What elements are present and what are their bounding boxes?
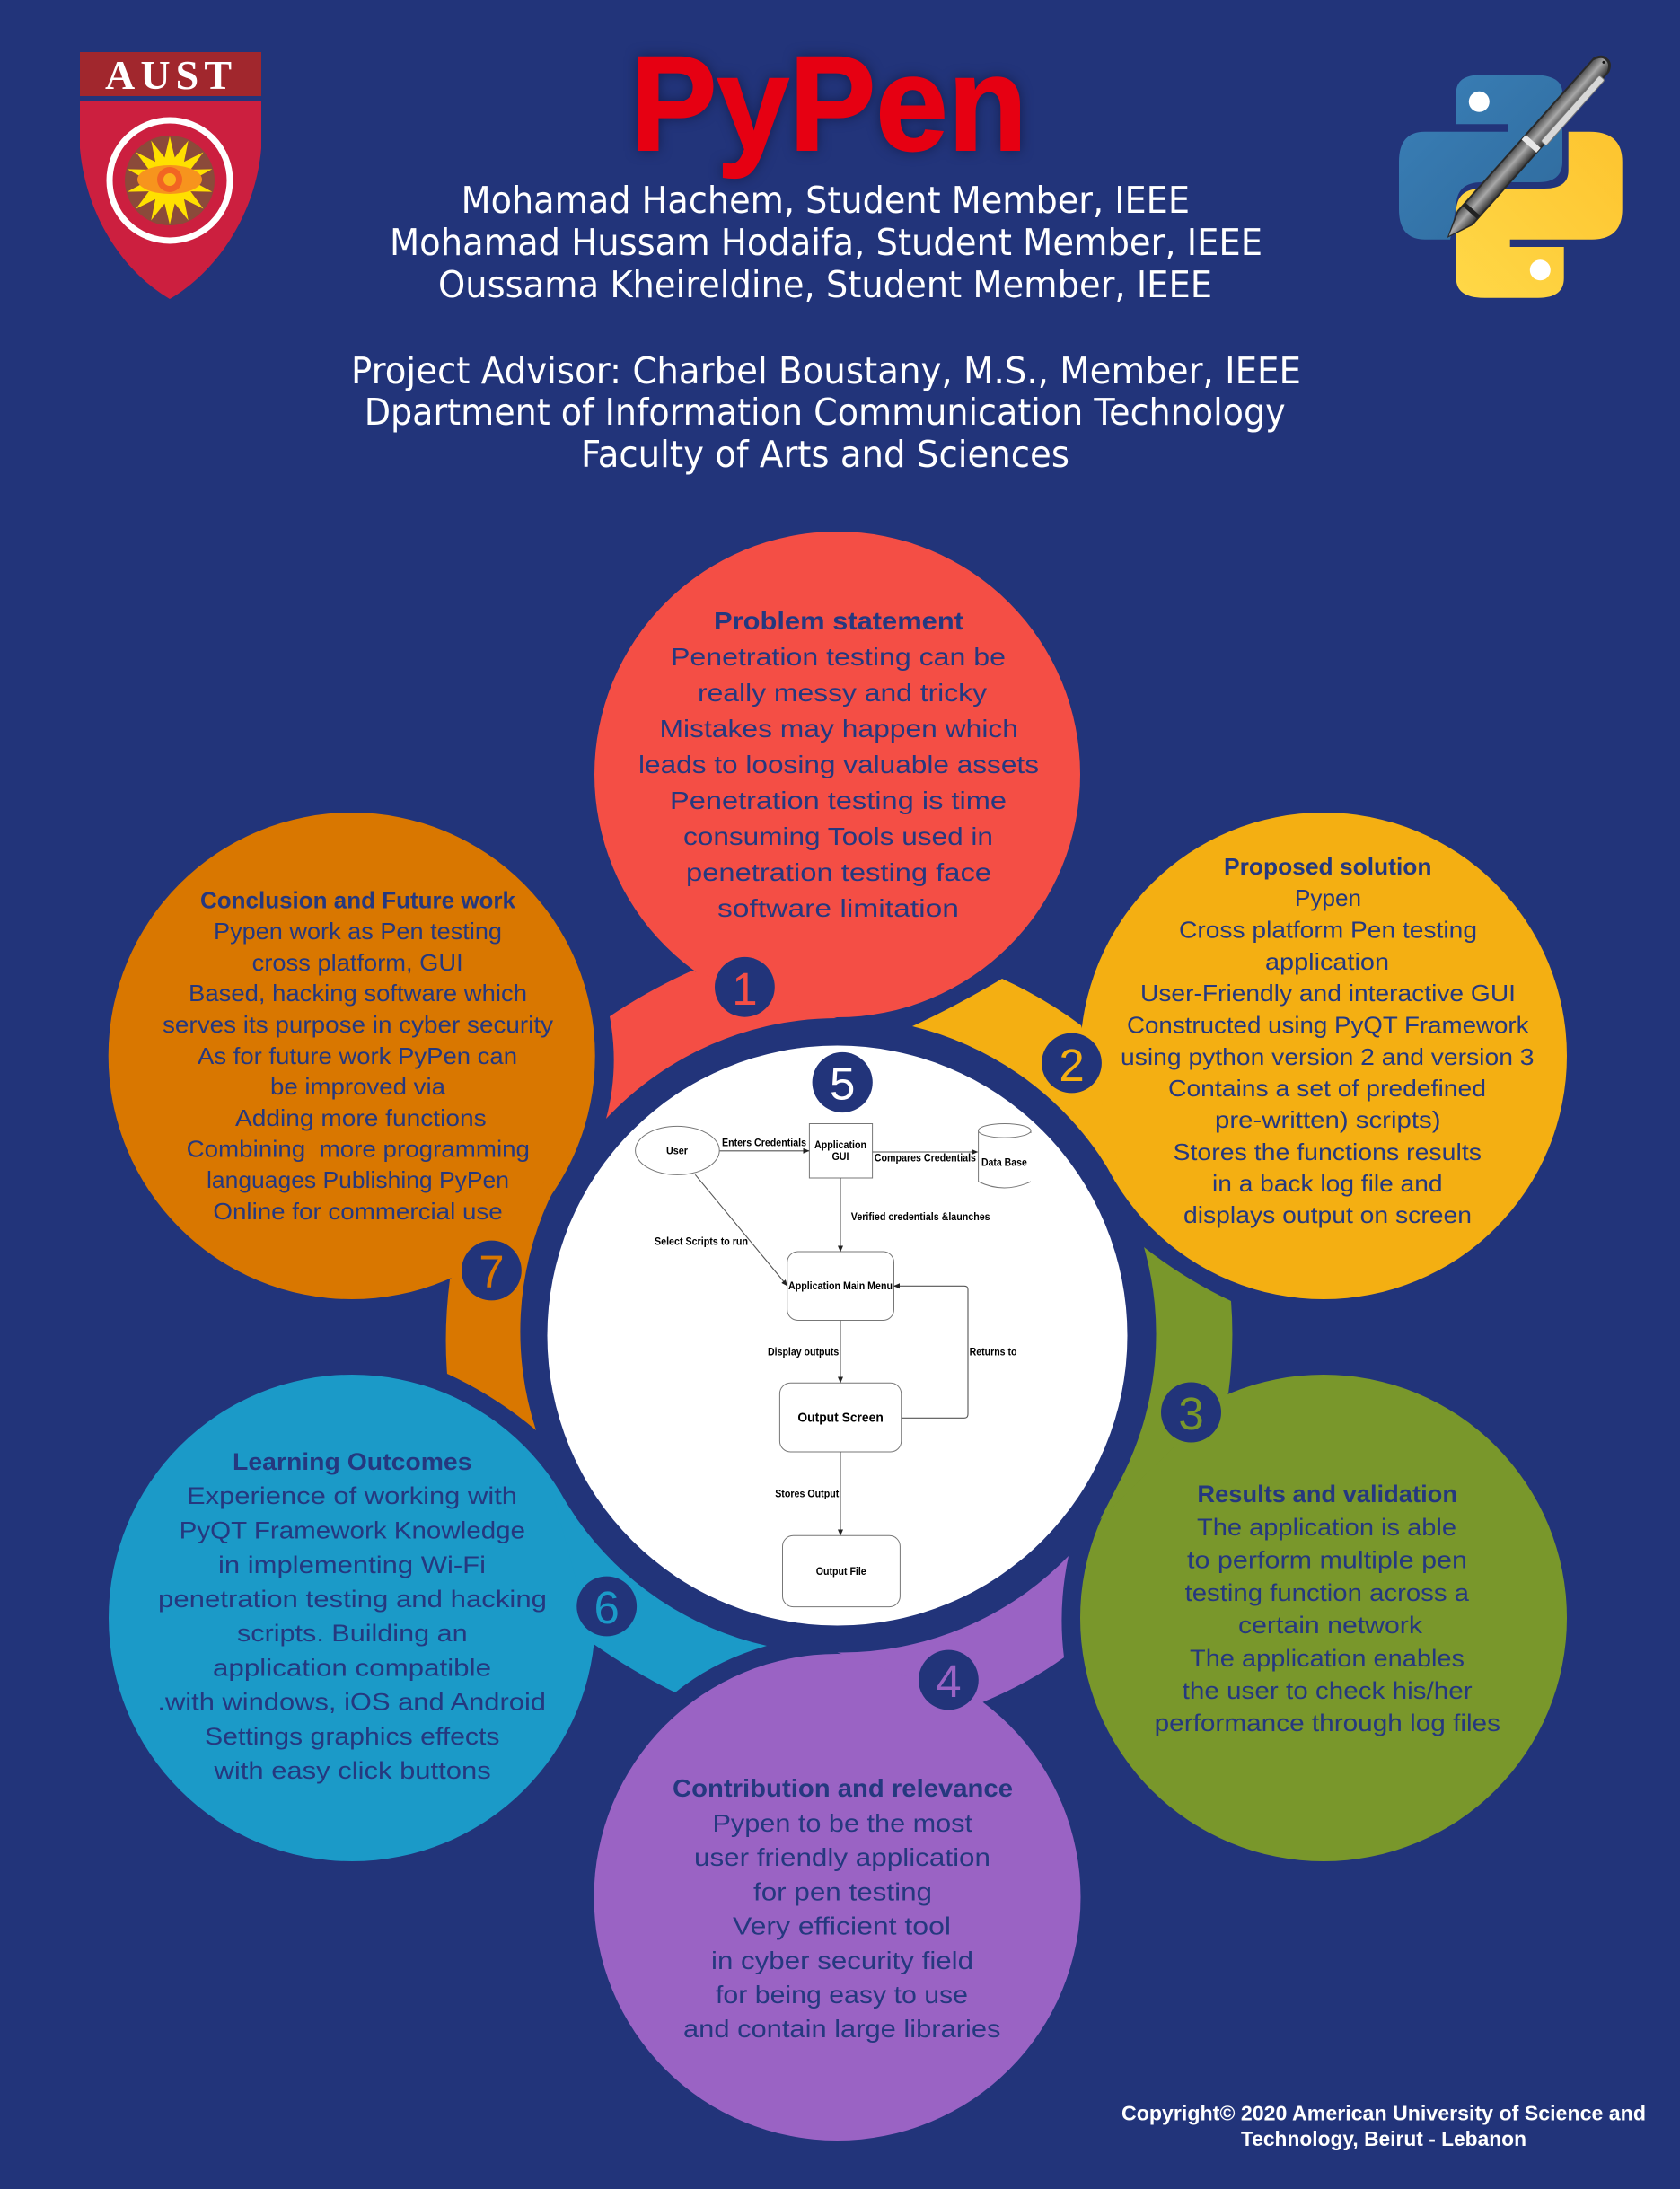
text: Learning Outcomes: application compatible [213,1655,491,1682]
text: Problem statement [638,607,1039,922]
text: Results and validation: testing function across a [1185,1579,1470,1606]
text: Problem statement: Penetration testing is time [670,787,1007,814]
text: Conclusion and Future work: Based, hacking software which [189,980,527,1007]
panel 6: Learning Outcomes [109,1375,767,1861]
text: Conclusion and Future work: Adding more functions [235,1104,487,1131]
text: Results and validation: performance through log files [1155,1710,1500,1736]
badge 5 [813,1052,873,1112]
logo text: AUST: AUST [105,52,232,98]
authors and advisor block: Mohamad Hachem, Student Member, IEEE [462,179,1190,222]
text: Contribution and relevance: Very efficient tool [733,1912,951,1939]
text: Problem statement: Mistakes may happen which [659,715,1018,743]
text: Conclusion and Future work: cross platform, GUI [252,949,463,976]
text: Conclusion and Future work [163,887,553,1225]
arrow: compares credentials: Compares Credentials [875,1153,976,1164]
arrow: enters credentials: Enters Credentials [722,1138,806,1149]
logo: Python with pen [1399,51,1623,298]
text: Proposed solution [1121,853,1534,1228]
icon: pen [1439,51,1616,246]
arrow: stores output [775,1452,840,1535]
badge 4 [919,1650,979,1710]
node: Data Base: Data Base [981,1157,1027,1168]
text: Conclusion and Future work: serves its purpose in cyber security [163,1011,553,1038]
authors and advisor block: Project Advisor: Charbel Boustany, M.S., Member, IEEE [351,349,1301,392]
text: Proposed solution: Proposed solution [1224,853,1431,880]
text: Learning Outcomes: Settings graphics effects [205,1723,499,1750]
authors and advisor block: Mohamad Hussam Hodaifa, Student Member, IEEE [390,221,1262,264]
text: Proposed solution: displays output on screen [1183,1201,1472,1228]
text: Proposed solution: pre-written) scripts) [1215,1106,1440,1133]
badge 7 [462,1241,522,1300]
badge 5: 5 [830,1059,855,1110]
text: Conclusion and Future work: be improved via [270,1073,446,1100]
copyright [1121,2102,1646,2150]
text: Contribution and relevance: Contribution and relevance [673,1774,1013,1802]
authors and advisor block: Dpartment of Information Communication Technology [365,391,1286,434]
badge 1: 1 [732,963,758,1015]
authors and advisor block [351,179,1301,476]
text: Contribution and relevance: for pen testing [753,1878,932,1906]
text: Results and validation: certain network [1238,1612,1423,1639]
text: Contribution and relevance: for being easy to use [716,1981,968,2009]
text: Learning Outcomes: scripts. Building an [237,1620,468,1647]
title: PyPen [630,28,1027,179]
node: Output File [783,1535,900,1607]
panel 1: Problem statement [594,532,1080,1119]
node: Application GUI: GUI [831,1152,849,1163]
copyright: Technology, Beirut - Lebanon [1241,2127,1526,2150]
text: Proposed solution: in a back log file and [1212,1170,1442,1197]
text: Proposed solution: Contains a set of predefined [1168,1075,1486,1102]
text: Contribution and relevance: Pypen to be the most [713,1809,972,1837]
text: Results and validation: the user to check his/her [1183,1677,1473,1704]
node: Output File: Output File [816,1567,866,1578]
badge 2: 2 [1059,1040,1085,1091]
text: Conclusion and Future work: Pypen work as Pen testing [214,918,502,945]
badge 2 [1042,1033,1102,1093]
panel 7: Conclusion and Future work [109,813,595,1430]
logo: AUST shield [80,52,261,299]
badge 7: 7 [479,1246,505,1297]
text: Proposed solution: application [1265,948,1389,975]
text: Results and validation: The application enables [1190,1645,1465,1672]
text: Learning Outcomes [157,1448,547,1784]
text: Proposed solution: Pypen [1295,884,1361,911]
authors and advisor block: Faculty of Arts and Sciences [581,433,1069,476]
text: Proposed solution: User-Friendly and interactive GUI [1140,980,1516,1007]
text: Conclusion and Future work: Combining more programming [187,1135,530,1162]
text: Problem statement: software limitation [717,894,959,922]
text: Learning Outcomes: Learning Outcomes [233,1448,472,1475]
panel 4: Contribution and relevance [594,1556,1081,2141]
arrow: select scripts: Select Scripts to run [655,1236,748,1247]
text: Problem statement: Problem statement [714,607,963,635]
text: Results and validation: Results and validation [1197,1481,1457,1508]
authors and advisor block: Oussama Kheireldine, Student Member, IEEE [438,263,1212,306]
node: Data Base [979,1124,1031,1188]
badge 3 [1161,1383,1221,1442]
node: Application Main Menu [787,1252,894,1320]
text: Problem statement: consuming Tools used in [683,822,993,850]
text: Problem statement: Penetration testing can be [671,643,1006,671]
arrow: display outputs: Display outputs [768,1347,839,1358]
text: Proposed solution: using python version 2 and version 3 [1121,1043,1534,1070]
panel 2: Proposed solution [912,813,1567,1299]
text: Proposed solution: Stores the functions results [1173,1138,1482,1165]
text: Problem statement: really messy and tricky [698,679,987,707]
text: Learning Outcomes: with easy click buttons [213,1757,491,1784]
text: Learning Outcomes: PyQT Framework Knowledge [180,1517,525,1544]
text: Contribution and relevance: and contain large libraries [683,2015,1000,2043]
node: User: User [666,1147,688,1157]
text: Contribution and relevance [673,1774,1013,2043]
node: User [636,1126,719,1174]
panel 3: Results and validation [1080,1247,1567,1861]
text: Results and validation: to perform multiple pen [1187,1546,1467,1573]
text: Contribution and relevance: in cyber security field [711,1947,973,1974]
node: Application Main Menu: Application Main Menu [788,1281,893,1292]
text: Contribution and relevance: user friendly application [694,1843,990,1871]
node: Output Screen: Output Screen [797,1411,884,1426]
text: Learning Outcomes: Experience of working with [187,1482,517,1509]
badge 4: 4 [936,1656,962,1707]
badge 1 [715,957,775,1017]
text: Proposed solution: Cross platform Pen testing [1179,917,1477,944]
text: Results and validation: The application is able [1197,1514,1456,1541]
node: Application GUI [809,1124,873,1178]
arrow: display outputs [768,1320,840,1383]
text: Problem statement: penetration testing face [686,858,991,886]
copyright: Copyright© 2020 American University of Science and [1121,2102,1646,2125]
arrow: verified credentials: Verified credentials &launches [851,1212,990,1223]
text: Problem statement: leads to loosing valuable assets [638,751,1039,778]
text: Learning Outcomes: penetration testing and hacking [158,1586,547,1613]
text: Results and validation [1155,1481,1500,1736]
text: Conclusion and Future work: As for future work PyPen can [198,1042,517,1069]
arrow: select scripts [655,1174,787,1286]
node: Application GUI: Application [814,1140,866,1151]
badge 3: 3 [1178,1388,1204,1439]
arrow: returns to [894,1286,1016,1418]
text: Learning Outcomes: in implementing Wi-Fi [218,1552,486,1578]
text: Conclusion and Future work: languages Publishing PyPen [207,1166,509,1193]
node: Output Screen [779,1383,902,1452]
arrow: stores output: Stores Output [775,1489,839,1499]
badge 6: 6 [594,1582,620,1633]
text: Proposed solution: Constructed using PyQT Framework [1127,1011,1530,1038]
text: Learning Outcomes: .with windows, iOS and Android [157,1688,546,1715]
badge 6 [576,1577,637,1636]
panel 5: central flow diagram [548,1045,1128,1625]
text: Conclusion and Future work: Conclusion and Future work [200,887,516,914]
arrow: returns to: Returns to [970,1347,1016,1358]
text: Conclusion and Future work: Online for commercial use [213,1198,503,1225]
